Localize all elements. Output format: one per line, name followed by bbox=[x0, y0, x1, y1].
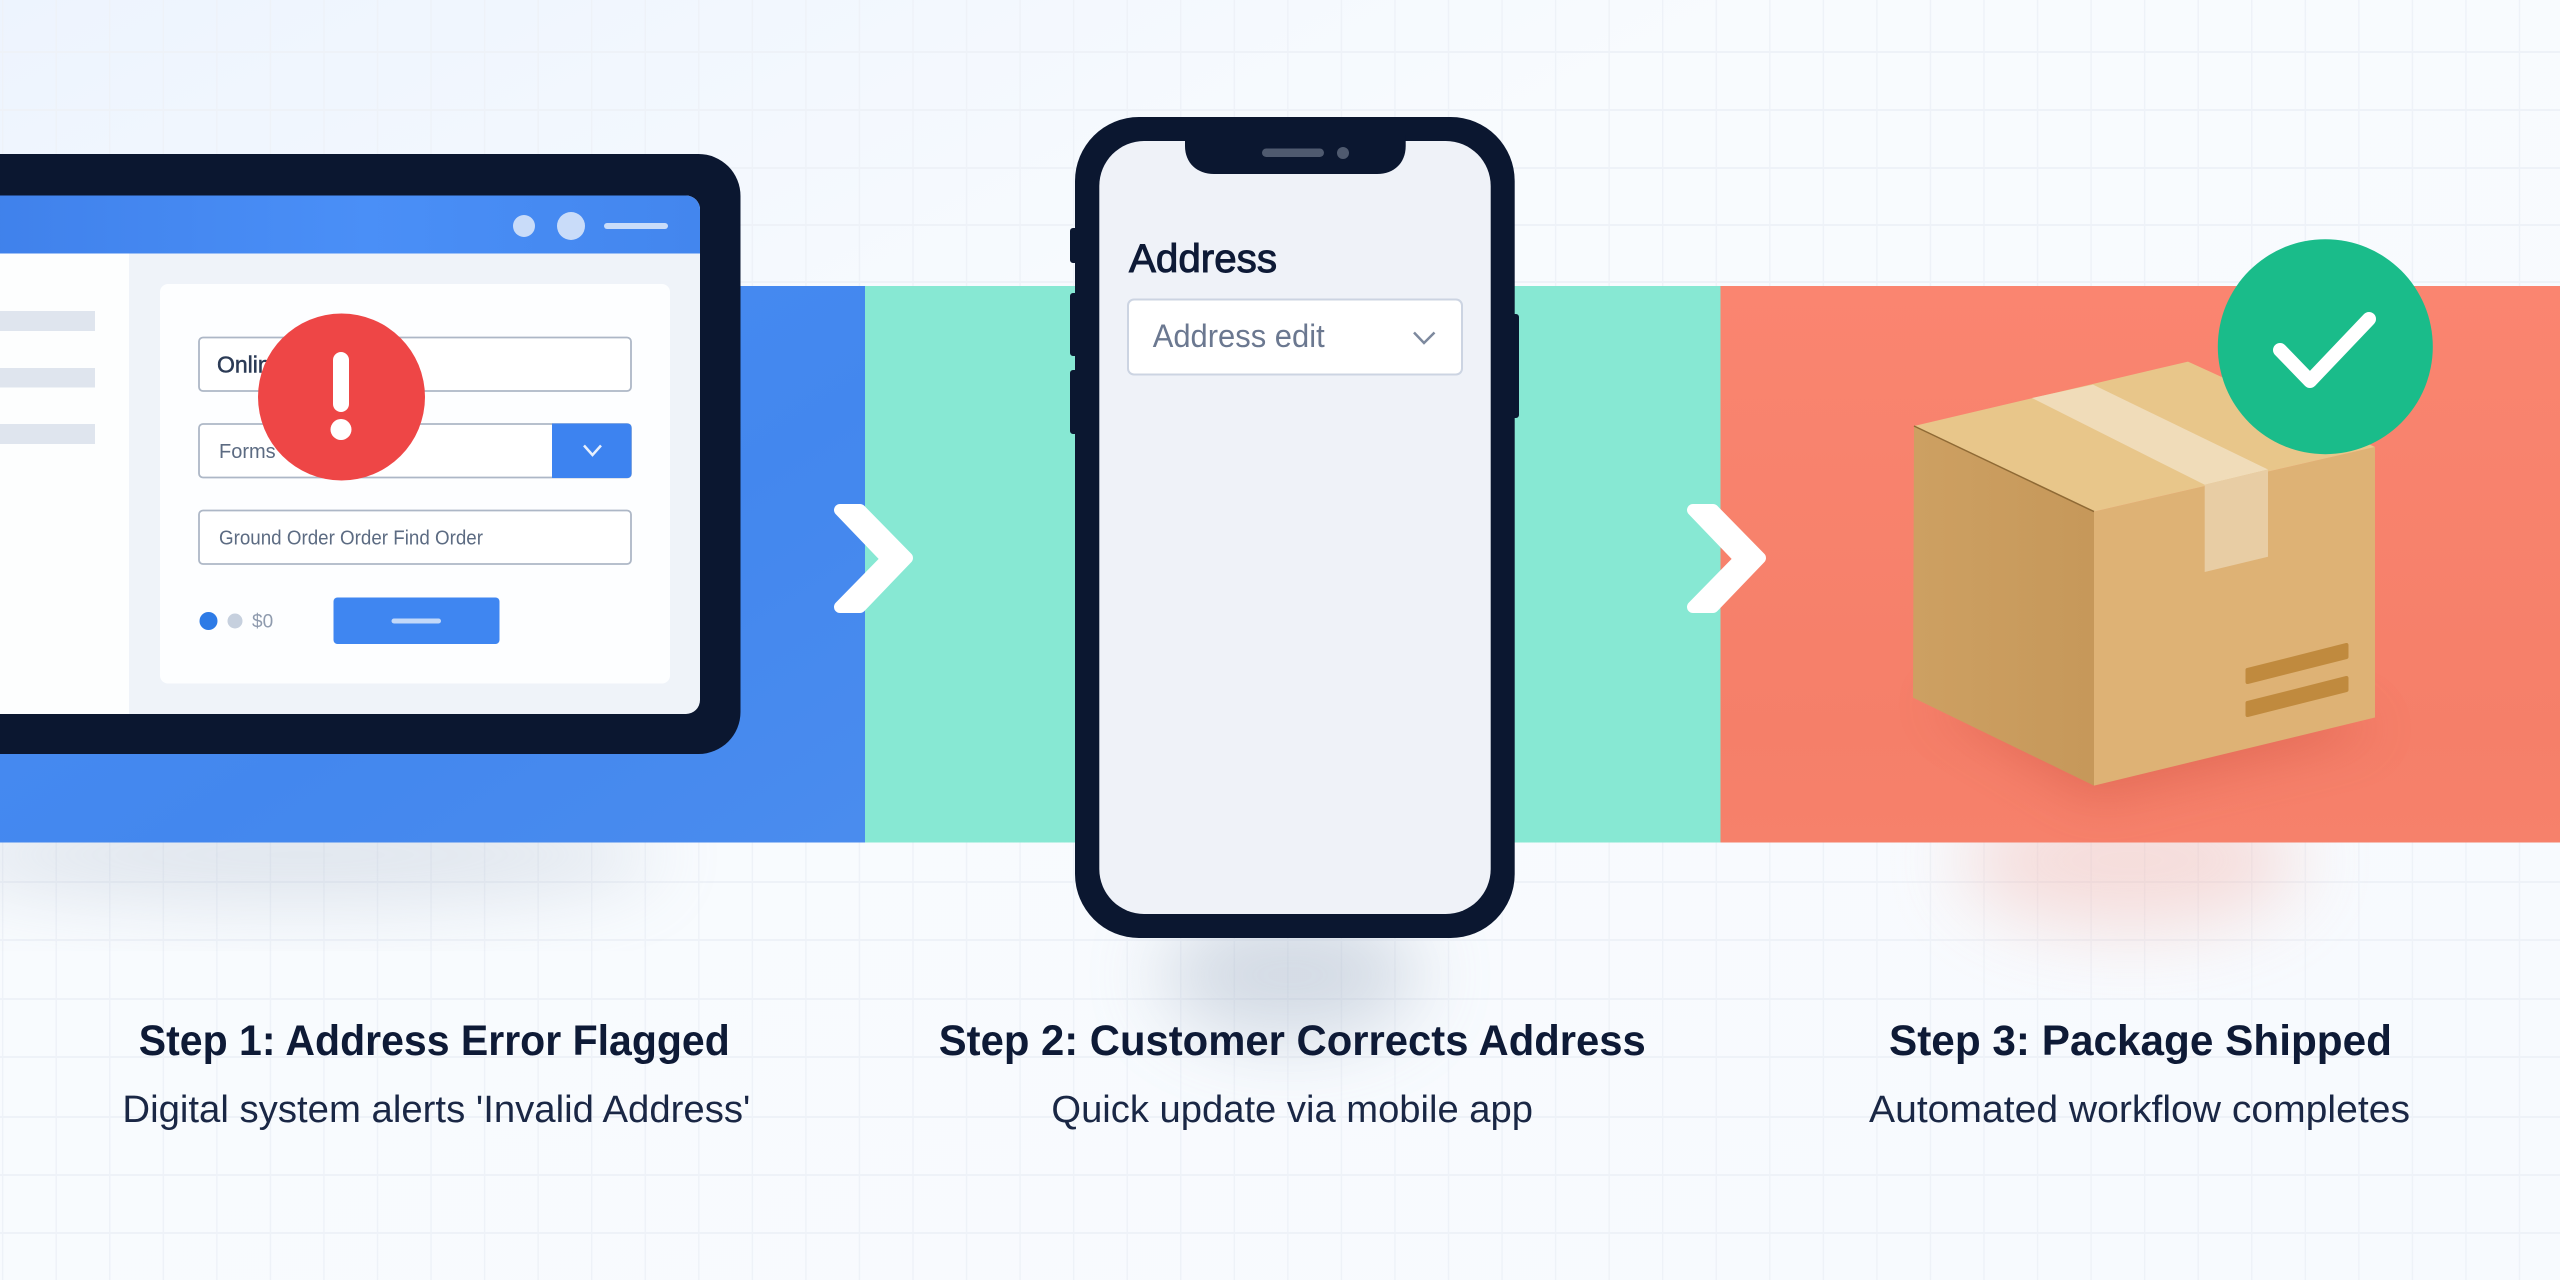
package left face bbox=[1913, 426, 2094, 786]
panel: coral band bbox=[1720, 286, 2560, 842]
description: step 3: Automated workflow completes bbox=[1869, 1089, 2410, 1131]
description: step 1: Digital system alerts 'Invalid Address' bbox=[122, 1089, 750, 1131]
phone screen bbox=[1099, 141, 1491, 914]
pagination dots and amount bbox=[200, 612, 273, 632]
notch bbox=[1185, 135, 1406, 174]
input: dropdown bbox=[199, 424, 632, 478]
package shadow bbox=[1930, 700, 2380, 800]
soft shadows below the colour bands bbox=[0, 790, 2300, 1040]
caption: step 2 bbox=[939, 1017, 1646, 1131]
input: online: Online bbox=[217, 352, 283, 378]
submit button bbox=[334, 598, 500, 644]
input: order bbox=[199, 510, 631, 564]
caption: step 3 bbox=[1869, 1017, 2410, 1131]
sidebar bbox=[0, 254, 129, 714]
phone body bbox=[1075, 117, 1515, 938]
heading: step 2: Step 2: Customer Corrects Address bbox=[939, 1017, 1646, 1065]
top left edge crease bbox=[1914, 426, 2094, 512]
browser header bar bbox=[0, 196, 700, 254]
input: dropdown: Forms bbox=[219, 441, 276, 463]
package top face bbox=[1914, 362, 2375, 512]
sidebar rows bbox=[0, 311, 95, 444]
form card bbox=[160, 284, 670, 684]
panel: blue band bbox=[0, 286, 865, 842]
address input bbox=[1128, 300, 1462, 374]
phone side buttons bbox=[1070, 228, 1519, 434]
input: online bbox=[199, 338, 631, 391]
tablet showing the address form bbox=[0, 154, 740, 754]
address heading: Address bbox=[1129, 237, 1277, 281]
tablet frame bbox=[0, 154, 740, 754]
tape on top bbox=[2032, 385, 2268, 485]
address input: Address edit bbox=[1153, 318, 1325, 354]
pagination dots and amount: $0 bbox=[252, 612, 273, 632]
arrow: step 2 to step 3 bbox=[1693, 510, 1760, 607]
arrow: step 1 to step 2 bbox=[840, 510, 907, 607]
heading: step 3: Step 3: Package Shipped bbox=[1889, 1017, 2392, 1065]
tape on front bbox=[2205, 470, 2268, 572]
header controls bbox=[513, 212, 668, 240]
speaker and camera bbox=[1262, 147, 1349, 159]
cardboard package with check badge bbox=[1913, 239, 2433, 800]
package right face bbox=[2094, 447, 2375, 786]
tablet screen bbox=[0, 196, 700, 714]
heading: step 1: Step 1: Address Error Flagged bbox=[139, 1017, 730, 1065]
panel: mint band bbox=[865, 286, 1720, 842]
icon: green check badge bbox=[2218, 239, 2433, 454]
description: step 2: Quick update via mobile app bbox=[1051, 1089, 1533, 1131]
smartphone with address form bbox=[1070, 117, 1519, 938]
caption: step 1 bbox=[122, 1017, 750, 1131]
package label marks bbox=[2248, 645, 2346, 715]
icon: red alert bbox=[258, 314, 425, 480]
input: order: Ground Order Order Find Order bbox=[219, 528, 483, 550]
